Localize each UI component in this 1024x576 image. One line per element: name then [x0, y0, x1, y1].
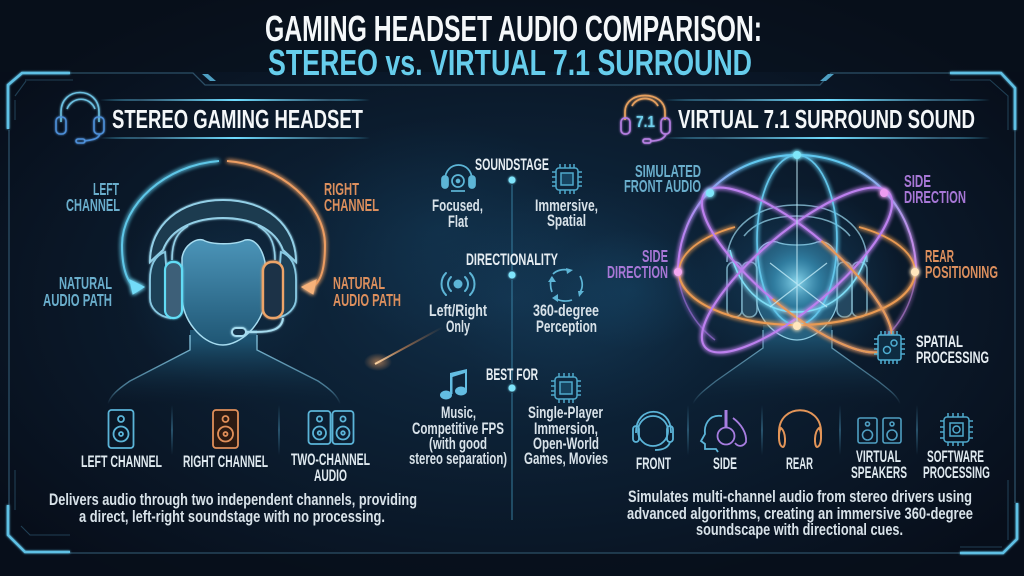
label: side direction left: SIDE [642, 246, 668, 266]
label: right channel caption: RIGHT CHANNEL [183, 453, 268, 471]
row: soundstage: Flat [448, 212, 468, 231]
arrow: right channel [227, 161, 325, 294]
head in sphere [692, 185, 902, 404]
description: surround [627, 487, 973, 539]
icon: 7.1 headset [621, 96, 670, 143]
label: side direction left: DIRECTION [607, 262, 668, 282]
face [182, 240, 265, 345]
body [108, 330, 340, 404]
row: best for: (with good [429, 434, 487, 453]
icon: headphone disc [442, 165, 475, 191]
row: directionality: DIRECTIONALITY [466, 251, 558, 269]
label: left channel: LEFT [93, 179, 119, 199]
label: natural audio path right [333, 273, 401, 310]
label: natural audio path left [43, 273, 112, 310]
label: software processing [923, 448, 990, 482]
nodes [674, 151, 919, 330]
label: virtual speakers: SPEAKERS [851, 464, 907, 482]
label: spatial processing: PROCESSING [916, 349, 989, 367]
label: side direction left [607, 246, 668, 282]
icon: 360 cycle [548, 268, 584, 302]
heading: stereo: STEREO GAMING HEADSET [112, 104, 363, 134]
icon: right speaker [213, 410, 238, 448]
label: natural audio path right: NATURAL [333, 273, 385, 293]
row: best for: Music, [441, 403, 476, 422]
row: soundstage: SOUNDSTAGE [475, 156, 549, 174]
arrow: left channel [122, 161, 219, 294]
row: best for: Competitive FPS [412, 419, 504, 438]
label: virtual speakers [851, 448, 907, 482]
icon: spatial processing chip [874, 331, 905, 364]
label: left channel: CHANNEL [66, 195, 120, 215]
title: GAMING HEADSET AUDIO COMPARISON: [265, 8, 762, 49]
label: simulated front audio [624, 161, 701, 196]
row: best for: BEST FOR [486, 366, 538, 384]
description: stereo [49, 490, 417, 526]
label: two-channel audio caption: TWO-CHANNEL [291, 451, 370, 469]
row: soundstage: Immersive, [535, 196, 598, 215]
row: best for [409, 366, 608, 468]
icon: software processing chip [940, 413, 973, 446]
illustration: sound sphere [674, 151, 919, 404]
panel: virtual 7.1 surround [607, 96, 998, 539]
row: directionality [429, 251, 599, 336]
description: stereo: Delivers audio through two independent channels, providing [49, 490, 417, 509]
label: side direction right: SIDE [904, 171, 931, 191]
icon: virtual speakers [858, 418, 901, 443]
icon: sound waves [442, 273, 474, 295]
illustration: head with headset [108, 185, 340, 404]
label: rear positioning [925, 246, 998, 282]
label: left channel [66, 179, 120, 215]
icon: chip [552, 164, 582, 194]
rays [770, 155, 827, 326]
row: best for: Games, Movies [524, 449, 608, 468]
label: side: SIDE [713, 455, 737, 473]
label: rear: REAR [786, 455, 813, 473]
row: directionality: 360-degree [533, 301, 599, 320]
comet streak [364, 313, 536, 371]
row: best for: Single-Player [528, 403, 603, 422]
icon: front headset [633, 412, 673, 450]
label: natural audio path left: AUDIO PATH [43, 290, 112, 310]
label: simulated front audio: SIMULATED [635, 161, 701, 181]
label: natural audio path left: NATURAL [59, 273, 112, 293]
title [265, 8, 762, 83]
label: right channel: CHANNEL [324, 195, 379, 215]
icon: 7.1 headset: 7.1 [636, 114, 655, 131]
icon: rear headphones [779, 410, 821, 447]
title: STEREO vs. VIRTUAL 7.1 SURROUND [268, 42, 752, 83]
label: right channel [324, 179, 379, 215]
label: simulated front audio: FRONT AUDIO [624, 176, 701, 196]
label: virtual speakers: VIRTUAL [856, 448, 901, 466]
row: best for: Immersion, [534, 419, 598, 438]
right ear cup [263, 252, 296, 318]
orbits [678, 155, 916, 376]
label: front: FRONT [636, 455, 671, 473]
label: software processing: SOFTWARE [927, 448, 984, 466]
panel: stereo gaming headset [43, 92, 417, 526]
label: spatial processing: SPATIAL [916, 333, 963, 351]
icon: side head [701, 410, 746, 452]
description: surround: soundscape with directional cues. [696, 520, 903, 539]
icon: left speaker [108, 410, 134, 448]
icon: chip [551, 373, 581, 403]
row: directionality: Perception [536, 317, 597, 336]
label: side direction right: DIRECTION [904, 187, 966, 207]
label: left channel caption: LEFT CHANNEL [81, 453, 162, 471]
icon: two-channel speakers [308, 411, 354, 444]
label: two-channel audio caption [291, 451, 370, 485]
icon: stereo headset [56, 92, 104, 143]
label: natural audio path right: AUDIO PATH [333, 290, 401, 310]
label: right channel: RIGHT [324, 179, 359, 199]
description: stereo: a direct, left-right soundstage with no processing. [79, 507, 385, 526]
label: side direction right [904, 171, 966, 207]
label: spatial processing [916, 333, 989, 367]
row: soundstage [432, 156, 598, 231]
row: soundstage: Focused, [432, 196, 483, 215]
icon: music note [440, 369, 467, 400]
microphone [232, 318, 283, 336]
left ear cup [150, 252, 182, 318]
panel: comparison center [364, 156, 608, 520]
row: directionality: Left/Right [429, 301, 487, 320]
row: directionality: Only [446, 317, 470, 336]
row: best for: stereo separation) [409, 449, 507, 468]
row: soundstage: Spatial [547, 211, 586, 230]
headband [150, 200, 296, 262]
row: best for: Open-World [533, 434, 599, 453]
label: rear positioning: REAR [925, 246, 954, 266]
label: two-channel audio caption: AUDIO [314, 467, 347, 485]
